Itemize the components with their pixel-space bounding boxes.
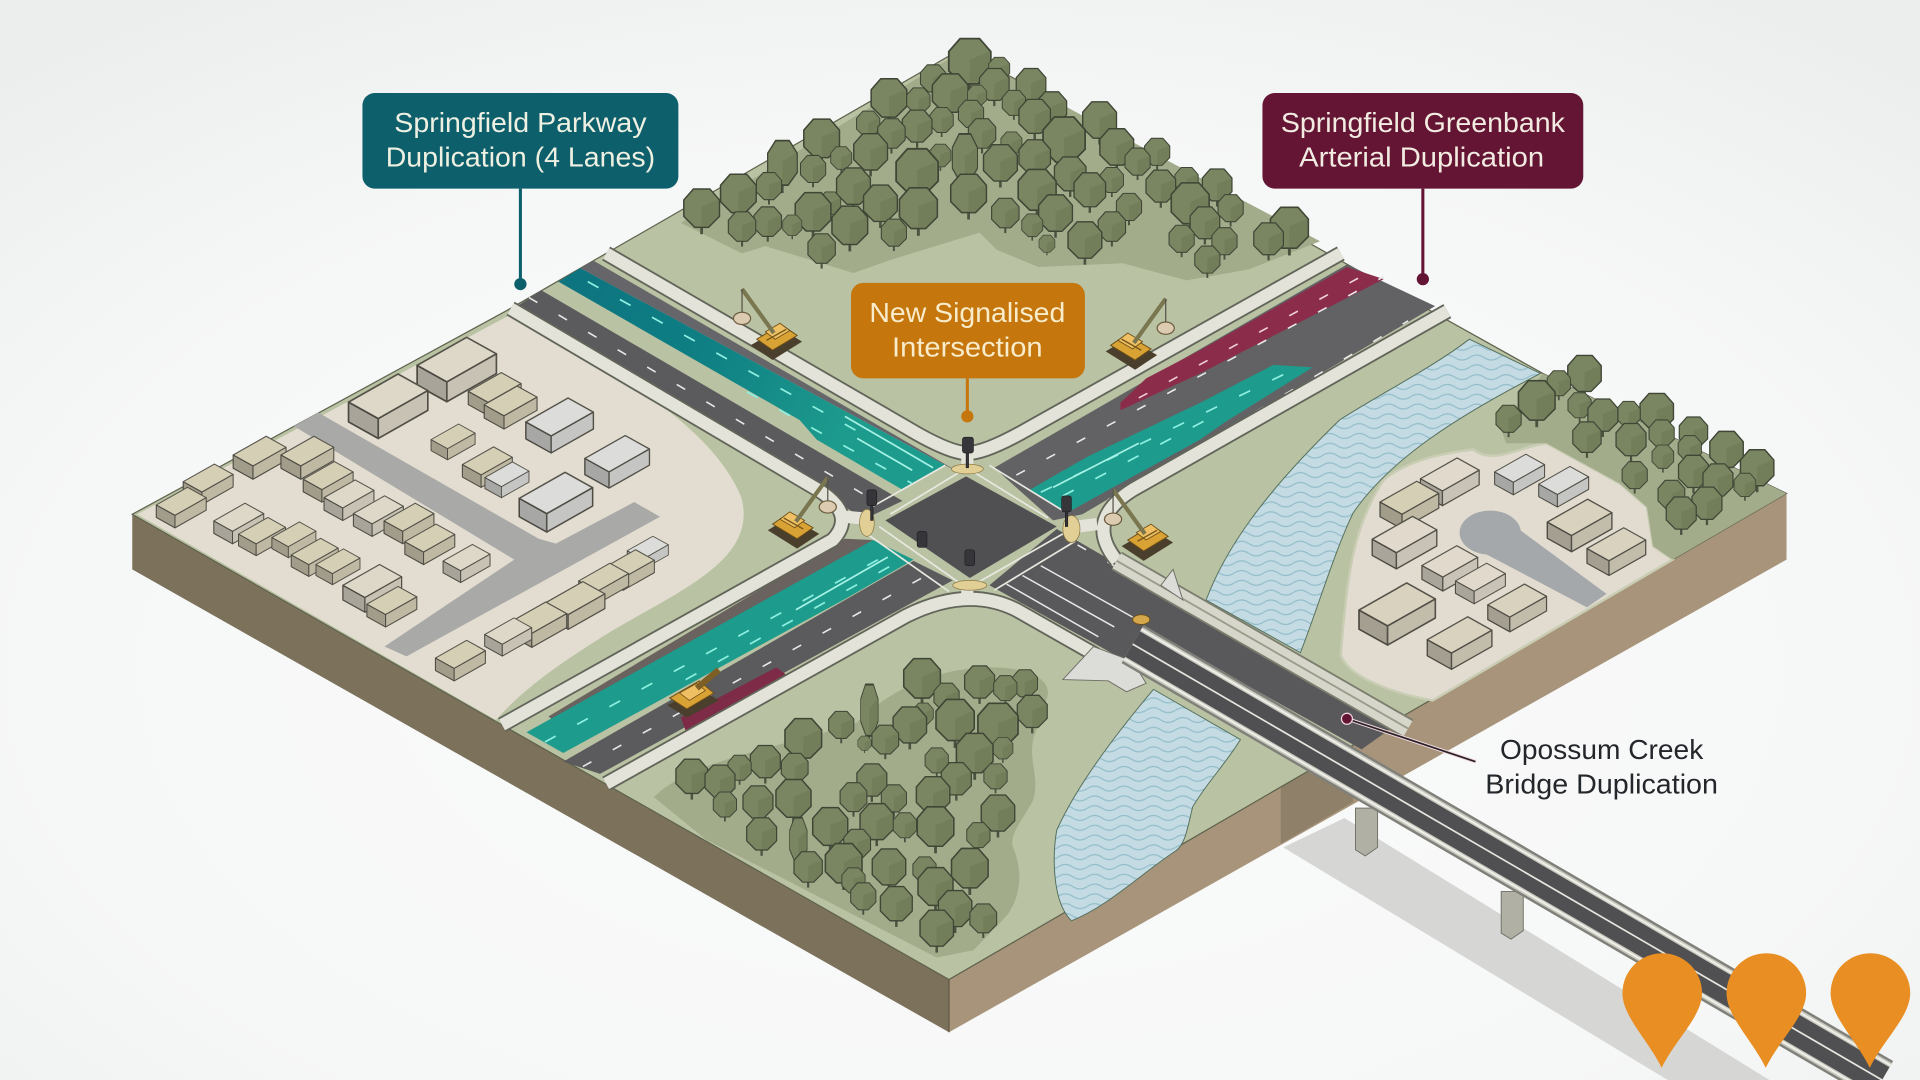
label: Springfield Greenbank Arterial Duplication: Arterial Duplication xyxy=(1299,142,1544,173)
bridge ground shadow xyxy=(1283,818,1769,1080)
label: New Signalised Intersection: New Signalised xyxy=(869,297,1065,328)
cranes xyxy=(667,289,1174,718)
trees: south forest xyxy=(676,659,1047,953)
creek lower xyxy=(1054,689,1240,921)
cul-de-sac xyxy=(1460,511,1607,607)
trees: east forest xyxy=(1496,355,1774,535)
buildings: west neighbourhood xyxy=(156,337,668,681)
forest ground south xyxy=(654,667,1048,958)
residential ground right xyxy=(1341,443,1673,700)
trees: north forest xyxy=(684,39,1308,278)
location pins xyxy=(1622,953,1910,1068)
land surface xyxy=(132,49,1787,980)
abutment wings xyxy=(1063,569,1183,692)
sidewalks xyxy=(502,253,1447,784)
label: New Signalised Intersection: Intersection xyxy=(892,331,1043,362)
lane markings xyxy=(529,277,1408,767)
forest ground east xyxy=(1500,373,1787,560)
label: Opossum Creek Bridge Duplication: Opossum Creek xyxy=(1500,734,1704,765)
bridge piers xyxy=(1356,808,1523,939)
road network xyxy=(502,253,1447,784)
corner islands xyxy=(860,464,1080,590)
intersection xyxy=(885,476,1057,578)
Opossum Creek bridge xyxy=(1124,629,1891,1080)
south-west arm lanes xyxy=(549,539,873,730)
isometric terrain block xyxy=(132,49,1787,1032)
label: Springfield Greenbank Arterial Duplication xyxy=(1262,93,1583,285)
residential ground left xyxy=(137,316,744,720)
residential streets left xyxy=(294,413,660,656)
forest ground north xyxy=(681,51,1320,280)
label: Opossum Creek Bridge Duplication xyxy=(1341,713,1718,799)
north-west arm lanes xyxy=(519,290,902,519)
upper carriageway kerb band xyxy=(1117,561,1408,729)
right wall xyxy=(949,493,1787,1032)
label: Springfield Greenbank Arterial Duplication: Springfield Greenbank xyxy=(1281,107,1566,138)
traffic signals xyxy=(867,437,1071,566)
left wall xyxy=(132,514,949,1032)
south-east arm lanes xyxy=(989,529,1396,749)
signal gantry vehicle xyxy=(1133,615,1150,624)
label: New Signalised Intersection xyxy=(851,283,1085,422)
buildings: east neighbourhood xyxy=(1359,454,1646,669)
creek upper xyxy=(1206,339,1540,653)
label: Springfield Parkway Duplication xyxy=(362,93,678,290)
crosswalks and stop lines xyxy=(867,465,1075,591)
label: Springfield Parkway Duplication: Springfield Parkway xyxy=(394,107,647,138)
label: Springfield Parkway Duplication: Duplication (4 Lanes) xyxy=(386,142,655,173)
north-east arm lanes xyxy=(994,264,1435,520)
label: Opossum Creek Bridge Duplication: Bridge Duplication xyxy=(1485,768,1718,799)
